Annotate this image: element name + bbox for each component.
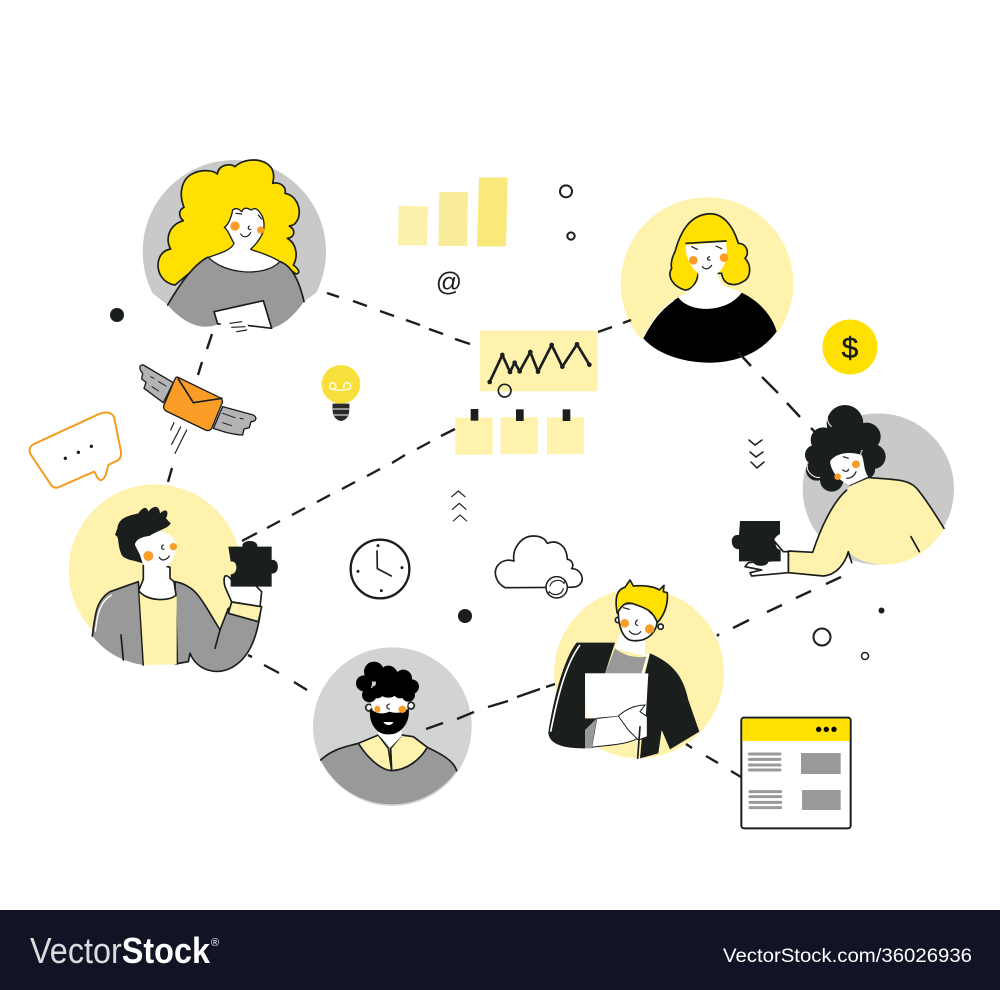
up chevrons [452, 491, 467, 521]
jacket highlight [95, 595, 112, 632]
lightbulb [322, 365, 360, 421]
hair outline highlight [807, 410, 832, 477]
yellow shirt collar [358, 735, 427, 771]
footer logo: VectorStock [30, 930, 211, 971]
paper and hand [214, 301, 272, 328]
window frame [741, 718, 851, 828]
face and neck [208, 208, 280, 272]
dollar coin [822, 320, 878, 374]
white cut below body [610, 332, 810, 390]
fringe line [686, 241, 726, 243]
speech bubble [30, 413, 121, 488]
curly hair [356, 662, 419, 702]
document [585, 673, 648, 718]
face [371, 688, 408, 718]
at sign icon: @ [436, 267, 462, 297]
face and neck [678, 242, 742, 309]
sweater outline [168, 257, 304, 305]
afro hair [805, 405, 886, 492]
yellow hair [616, 580, 667, 623]
registered mark: ® [211, 937, 219, 949]
speed lines [171, 423, 187, 453]
footer url: VectorStock.com/36026936 [723, 946, 972, 967]
window header [742, 719, 850, 741]
cloud sync icon [495, 536, 582, 598]
panel: man holding puzzle piece [69, 484, 278, 671]
window control dots [816, 727, 837, 732]
clock icon [351, 540, 409, 598]
ears [366, 702, 414, 711]
wing feather lines [151, 377, 243, 426]
yellow bob hair [670, 214, 750, 290]
neck [378, 730, 402, 747]
cheeks [834, 460, 860, 480]
panel: woman with black afro and puzzle piece [732, 405, 954, 576]
grey sweater [168, 257, 304, 328]
yellow circle backdrop [69, 484, 241, 657]
ears [615, 617, 663, 629]
panel: woman with yellow bob [610, 197, 810, 390]
sweater outline [321, 743, 457, 771]
grey sleeve sliver [585, 718, 597, 748]
jacket outlines [92, 582, 220, 665]
face [135, 531, 176, 569]
left wing [140, 365, 173, 403]
puzzle piece [228, 541, 278, 587]
grey sweater [321, 743, 457, 804]
yellow circle backdrop [554, 588, 724, 758]
lower front edge [638, 727, 640, 758]
winged envelope and speech bubble [30, 365, 360, 488]
black hair [115, 507, 171, 563]
footer bar [0, 910, 1000, 990]
facial features [623, 608, 654, 634]
left jacket [92, 582, 143, 665]
hand [224, 576, 262, 607]
browser window icon [741, 718, 851, 828]
neck [615, 633, 647, 657]
grey t-shirt [605, 648, 647, 673]
jacket highlight [551, 645, 648, 732]
shirt [139, 591, 177, 665]
misc icons [351, 491, 582, 598]
line chart card [480, 331, 598, 391]
cheeks [620, 619, 654, 634]
neck [139, 560, 176, 600]
image blocks [801, 753, 841, 810]
cheeks [689, 253, 728, 265]
nose [387, 704, 389, 709]
grey circle backdrop [313, 647, 472, 806]
text lines [749, 754, 781, 808]
panel: woman with curly yellow hair [137, 160, 330, 350]
white cut below body [137, 290, 330, 350]
central dashboard icons [398, 177, 598, 455]
line chart [487, 342, 592, 384]
face [618, 603, 657, 641]
envelope [164, 377, 222, 431]
envelope flap [178, 379, 222, 403]
panel: man with yellow hair and document [548, 580, 724, 758]
hand [745, 540, 788, 576]
ring on chart card [498, 384, 511, 397]
grey circle backdrop [803, 413, 954, 565]
right wing [213, 407, 256, 435]
cheeks [143, 543, 177, 561]
speech dots [64, 445, 93, 460]
mouth [383, 722, 393, 725]
face [830, 453, 868, 485]
cheeks [374, 706, 406, 713]
panel: bearded man [313, 647, 472, 806]
white sleeve [592, 705, 647, 747]
jacket right side [640, 653, 699, 758]
sweater highlight [643, 301, 673, 337]
sticky notes [455, 409, 584, 455]
yellow circle backdrop [621, 197, 793, 370]
cheeks [230, 221, 264, 234]
dashed network connectors [168, 293, 841, 777]
beard [370, 708, 409, 734]
down chevrons [749, 440, 764, 468]
yellow sweater [788, 478, 944, 576]
shirt cuff [228, 602, 262, 622]
black sweater [643, 293, 777, 363]
hand [618, 705, 647, 740]
bar chart [398, 177, 508, 246]
facial features [692, 246, 722, 269]
facial features [159, 545, 169, 560]
right jacket and raised arm [175, 582, 260, 671]
sweater outline [788, 477, 944, 576]
puzzle piece [732, 521, 781, 566]
small rings [560, 185, 575, 240]
facial features [236, 213, 262, 237]
dollar coin: $ [842, 332, 859, 365]
facial features [843, 457, 856, 478]
grey circle backdrop [143, 160, 326, 343]
curly yellow hair [158, 160, 299, 285]
jacket left side [548, 643, 615, 748]
decorative dots and rings [110, 308, 884, 660]
